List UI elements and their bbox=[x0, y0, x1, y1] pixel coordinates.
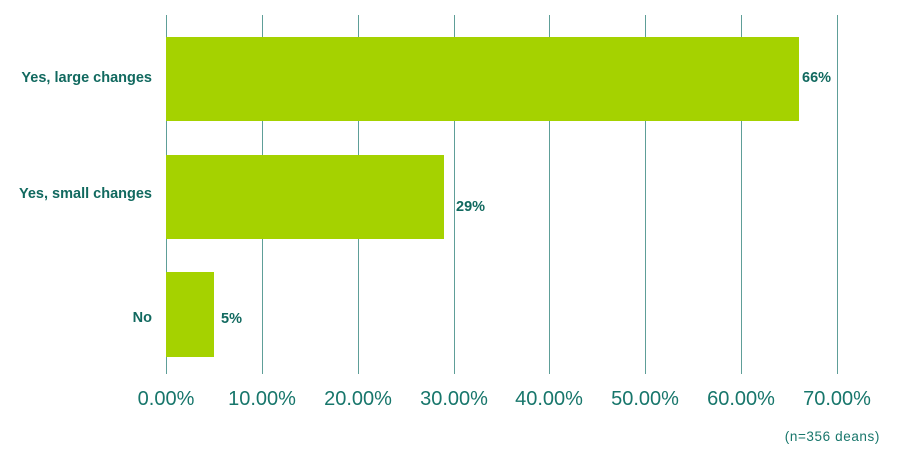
bar: yes large changes bbox=[166, 37, 799, 121]
x axis labels: 10.00% bbox=[228, 388, 296, 410]
x axis labels: 20.00% bbox=[324, 388, 392, 410]
category labels bbox=[19, 70, 152, 326]
x axis labels: 40.00% bbox=[515, 388, 583, 410]
category labels: Yes, large changes bbox=[21, 70, 152, 86]
bar: no bbox=[166, 272, 214, 357]
category labels: Yes, small changes bbox=[19, 186, 152, 202]
x axis labels bbox=[138, 388, 871, 410]
x axis labels: 30.00% bbox=[420, 388, 488, 410]
x axis labels: 60.00% bbox=[707, 388, 775, 410]
x axis labels: 50.00% bbox=[611, 388, 679, 410]
value labels: 29% bbox=[456, 199, 485, 215]
sample size note: (n=356 deans) bbox=[785, 429, 880, 444]
x axis labels: 70.00% bbox=[803, 388, 871, 410]
value labels: 5% bbox=[221, 311, 242, 327]
value labels: 66% bbox=[802, 70, 831, 86]
category labels: No bbox=[133, 310, 152, 326]
bar: yes small changes bbox=[166, 155, 444, 239]
x axis labels: 0.00% bbox=[138, 388, 195, 410]
bar chart bbox=[166, 37, 799, 357]
value labels bbox=[221, 70, 831, 327]
